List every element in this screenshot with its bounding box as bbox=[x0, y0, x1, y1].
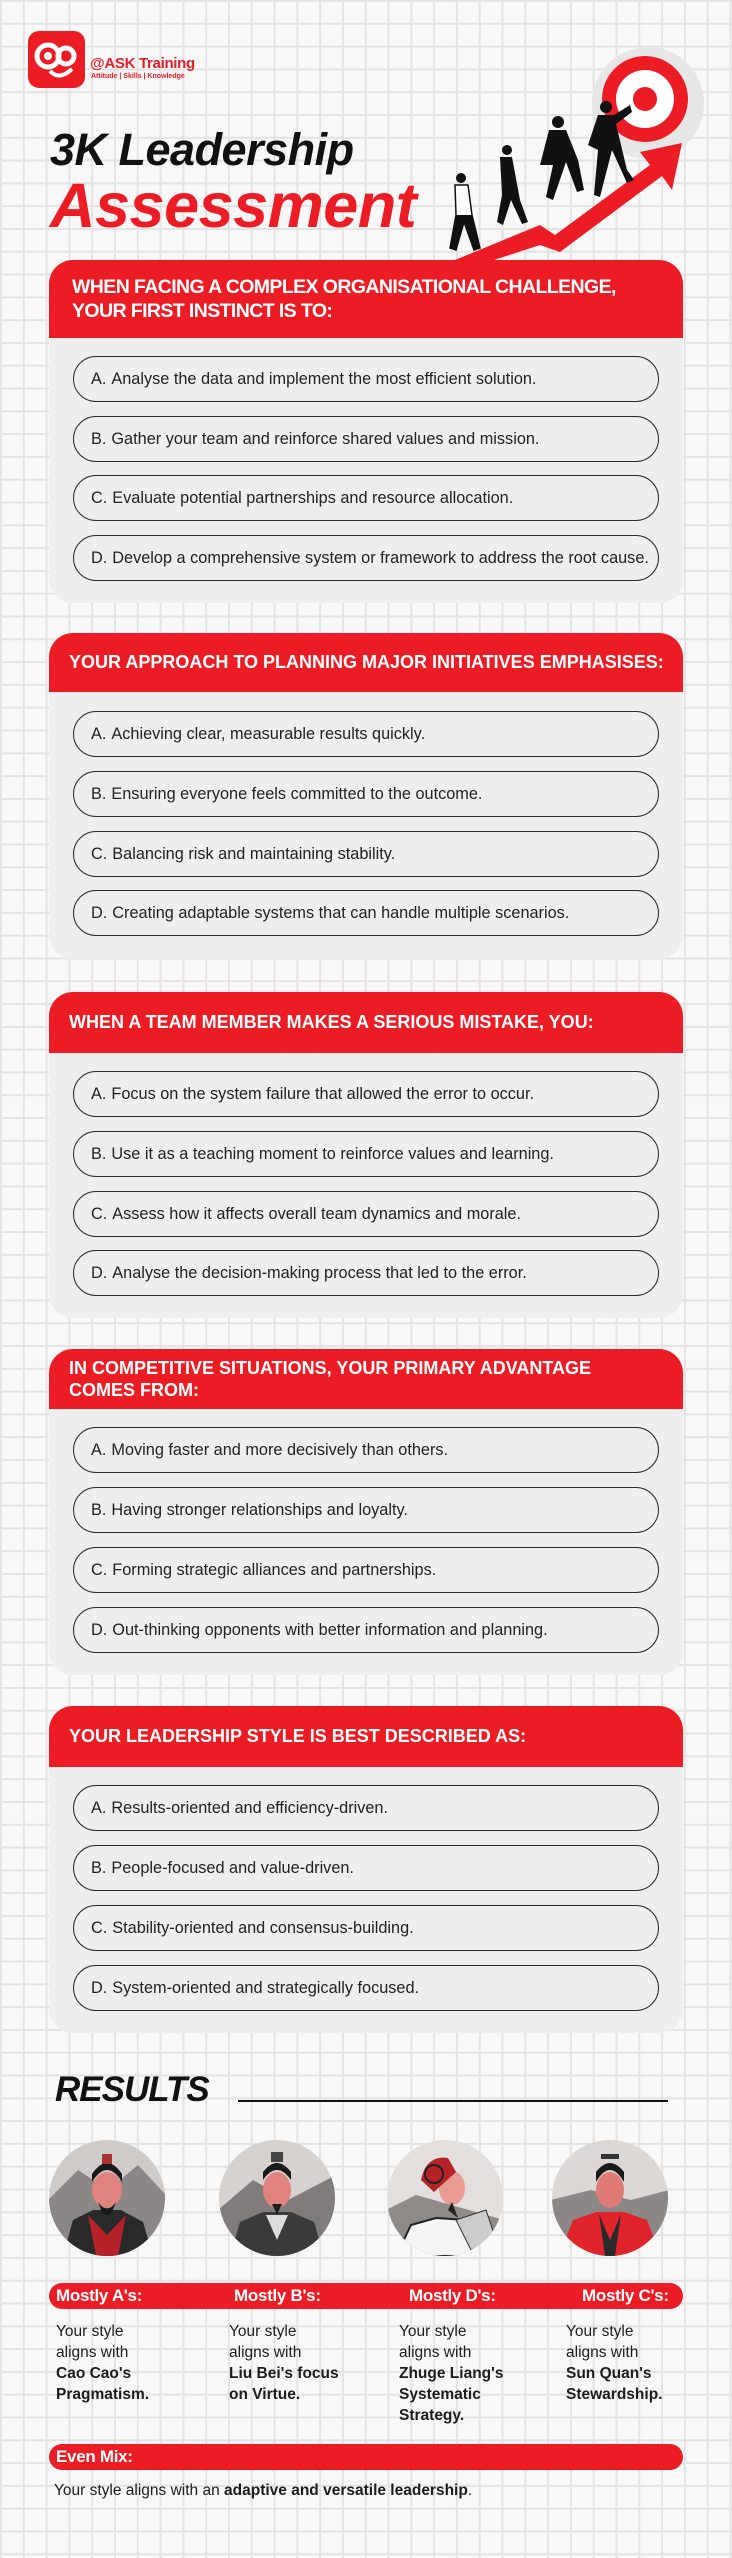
results bar: categories: Mostly A's: bbox=[56, 2286, 142, 2305]
panel: question 5 bbox=[49, 1706, 683, 2033]
heading: question 4: COMES FROM: bbox=[69, 1380, 199, 1400]
option B: Gather your team and reinforce shared values and mission. bbox=[111, 430, 539, 448]
results bar: categories bbox=[49, 2283, 683, 2309]
icon: logo mark bbox=[28, 31, 85, 88]
results bar: categories: Mostly B's: bbox=[234, 2286, 321, 2305]
option A: A. bbox=[91, 1441, 106, 1459]
results bar: categories: Mostly D's: bbox=[409, 2286, 496, 2305]
option A: A. bbox=[91, 370, 106, 388]
option D bbox=[73, 535, 659, 581]
option C bbox=[73, 831, 659, 877]
result text: mostly B: Your style bbox=[229, 2323, 296, 2340]
option D: D. bbox=[91, 1979, 107, 1997]
option D bbox=[73, 1965, 659, 2011]
option B: B. bbox=[91, 430, 106, 448]
option D: Creating adaptable systems that can handle multiple scenarios. bbox=[112, 904, 569, 922]
result text: mostly D bbox=[399, 2323, 503, 2424]
illustration: climbing figures, arrow and target bbox=[449, 48, 704, 260]
result text: mostly B: on Virtue. bbox=[229, 2386, 300, 2403]
option A: Moving faster and more decisively than others. bbox=[111, 1441, 448, 1459]
option C: Evaluate potential partnerships and resource allocation. bbox=[112, 489, 513, 507]
heading: question 4: IN COMPETITIVE SITUATIONS, YOUR PRIMARY ADVANTAGE bbox=[69, 1358, 591, 1378]
title: Assessment bbox=[50, 171, 416, 241]
result text: mostly D: aligns with bbox=[399, 2344, 471, 2361]
option D bbox=[73, 1607, 659, 1653]
option A bbox=[73, 1427, 659, 1473]
option D: System-oriented and strategically focused. bbox=[112, 1979, 419, 1997]
option B: People-focused and value-driven. bbox=[111, 1859, 354, 1877]
option A: A. bbox=[91, 1085, 106, 1103]
option B: B. bbox=[91, 1145, 106, 1163]
result text: mostly A bbox=[56, 2323, 149, 2403]
results bar: categories: Mostly C's: bbox=[582, 2286, 669, 2305]
option D: D. bbox=[91, 904, 107, 922]
portrait: Zhuge Liang bbox=[387, 2140, 502, 2256]
option D: Analyse the decision-making process that led to the error. bbox=[112, 1264, 527, 1282]
result text: mostly C: Your style bbox=[566, 2323, 634, 2340]
heading: question 3: WHEN A TEAM MEMBER MAKES A SERIOUS MISTAKE, YOU: bbox=[69, 1012, 594, 1032]
result text: mostly B bbox=[229, 2323, 339, 2403]
portrait: Sun Quan bbox=[552, 2140, 668, 2256]
brand text: @ASK Training bbox=[90, 55, 195, 72]
option C: C. bbox=[91, 845, 107, 863]
result text: mostly B: aligns with bbox=[229, 2344, 301, 2361]
option D: Develop a comprehensive system or framework to address the root cause. bbox=[112, 549, 649, 567]
even mix bar bbox=[49, 2444, 683, 2470]
even mix text: Your style aligns with an adaptive and versatile leadership. bbox=[54, 2482, 472, 2499]
option B: B. bbox=[91, 1501, 106, 1519]
option A: A. bbox=[91, 1799, 106, 1817]
option B: Use it as a teaching moment to reinforce values and learning. bbox=[111, 1145, 554, 1163]
result text: mostly A: aligns with bbox=[56, 2344, 128, 2361]
option A bbox=[73, 356, 659, 402]
panel: question 3 bbox=[49, 992, 683, 1318]
option C: Assess how it affects overall team dynamics and morale. bbox=[112, 1205, 521, 1223]
option D: Out-thinking opponents with better information and planning. bbox=[112, 1621, 548, 1639]
option A bbox=[73, 1785, 659, 1831]
option A: Focus on the system failure that allowed the error to occur. bbox=[111, 1085, 534, 1103]
option A: Analyse the data and implement the most efficient solution. bbox=[111, 370, 536, 388]
option C: C. bbox=[91, 1205, 107, 1223]
option A bbox=[73, 711, 659, 757]
option B bbox=[73, 1487, 659, 1533]
option C: Forming strategic alliances and partnerships. bbox=[112, 1561, 436, 1579]
result text: mostly D: Systematic bbox=[399, 2386, 481, 2403]
option B: Ensuring everyone feels committed to the outcome. bbox=[111, 785, 482, 803]
logo: Attitude | Skills | Knowledge bbox=[91, 73, 185, 80]
heading: question 5: YOUR LEADERSHIP STYLE IS BEST DESCRIBED AS: bbox=[69, 1726, 526, 1746]
result text: mostly C: aligns with bbox=[566, 2344, 638, 2361]
heading: question 1 bbox=[49, 260, 683, 338]
title: 3K Leadership bbox=[50, 124, 354, 175]
portrait: Cao Cao bbox=[49, 2140, 165, 2256]
heading: results: RESULTS bbox=[55, 2070, 209, 2109]
option A: A. bbox=[91, 725, 106, 743]
result text: mostly A: Your style bbox=[56, 2323, 124, 2340]
result text: mostly A: Cao Cao's bbox=[56, 2365, 131, 2382]
option C: C. bbox=[91, 1919, 107, 1937]
result text: mostly A: Pragmatism. bbox=[56, 2386, 149, 2403]
panel: question 4 bbox=[49, 1349, 683, 1675]
title bbox=[48, 124, 419, 241]
option C: Stability-oriented and consensus-building. bbox=[112, 1919, 414, 1937]
panel: question 1 bbox=[49, 260, 683, 603]
heading: question 2: YOUR APPROACH TO PLANNING MAJOR INITIATIVES EMPHASISES: bbox=[69, 652, 664, 672]
option C: Balancing risk and maintaining stability. bbox=[112, 845, 395, 863]
option B: Having stronger relationships and loyalty. bbox=[111, 1501, 408, 1519]
option C bbox=[73, 1191, 659, 1237]
option B bbox=[73, 1131, 659, 1177]
heading: question 1: YOUR FIRST INSTINCT IS TO: bbox=[72, 300, 332, 322]
option A bbox=[73, 1071, 659, 1117]
option A: Achieving clear, measurable results quickly. bbox=[111, 725, 425, 743]
result text: mostly C: Stewardship. bbox=[566, 2386, 662, 2403]
even mix bar: Even Mix: bbox=[56, 2447, 133, 2466]
option D: D. bbox=[91, 1264, 107, 1282]
option D bbox=[73, 890, 659, 936]
portrait: Liu Bei bbox=[219, 2140, 335, 2256]
option B: B. bbox=[91, 1859, 106, 1877]
heading: question 4 bbox=[49, 1349, 683, 1409]
option C bbox=[73, 1905, 659, 1951]
option C bbox=[73, 475, 659, 521]
panel: question 2 bbox=[49, 633, 683, 959]
result text: mostly D: Strategy. bbox=[399, 2407, 464, 2424]
option A: Results-oriented and efficiency-driven. bbox=[111, 1799, 388, 1817]
option C bbox=[73, 1547, 659, 1593]
heading: question 1: WHEN FACING A COMPLEX ORGANISATIONAL CHALLENGE, bbox=[72, 276, 616, 298]
result text: mostly C: Sun Quan's bbox=[566, 2365, 652, 2382]
result text: mostly D: Zhuge Liang's bbox=[399, 2365, 503, 2382]
option D: D. bbox=[91, 1621, 107, 1639]
option D bbox=[73, 1250, 659, 1296]
heading: question 3 bbox=[49, 992, 683, 1053]
logo bbox=[28, 31, 195, 88]
option D: D. bbox=[91, 549, 107, 567]
result text: mostly C bbox=[566, 2323, 662, 2403]
result text: mostly B: Liu Bei's focus bbox=[229, 2365, 339, 2382]
heading: question 5 bbox=[49, 1706, 683, 1767]
option B bbox=[73, 416, 659, 462]
option B bbox=[73, 771, 659, 817]
option C: C. bbox=[91, 1561, 107, 1579]
option B bbox=[73, 1845, 659, 1891]
option C: C. bbox=[91, 489, 107, 507]
result text: mostly D: Your style bbox=[399, 2323, 466, 2340]
option B: B. bbox=[91, 785, 106, 803]
heading: question 2 bbox=[49, 633, 683, 692]
